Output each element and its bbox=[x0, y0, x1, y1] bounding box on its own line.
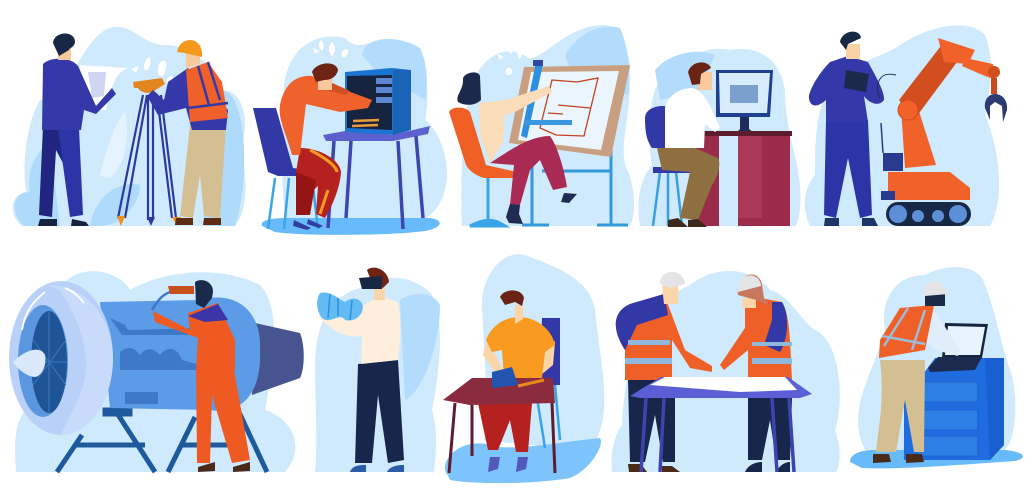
woman bbox=[457, 72, 577, 224]
background blob bbox=[461, 25, 634, 226]
floor bbox=[445, 438, 601, 483]
tripod bbox=[117, 95, 181, 226]
nozzle bbox=[252, 323, 304, 395]
man bbox=[873, 281, 960, 463]
panel: surveyors bbox=[13, 27, 245, 226]
cabinet bbox=[904, 358, 1004, 460]
background blob bbox=[612, 271, 840, 472]
floor bbox=[850, 450, 1023, 468]
white sprig bbox=[131, 57, 173, 84]
background blob bbox=[638, 49, 800, 226]
panel: computer repair bbox=[253, 37, 447, 235]
background blob bbox=[282, 37, 447, 226]
panel: soldering table bbox=[443, 254, 604, 483]
computer tower bbox=[345, 68, 411, 135]
white sprig bbox=[497, 42, 522, 75]
chair bbox=[645, 106, 700, 226]
drafting board bbox=[509, 60, 630, 157]
floor bbox=[262, 218, 440, 235]
drafting stand bbox=[522, 150, 628, 225]
background blob bbox=[805, 25, 999, 226]
robot arm bbox=[877, 38, 1007, 226]
white sprig bbox=[313, 40, 348, 57]
leaf bbox=[400, 294, 440, 400]
nacelle and fan bbox=[9, 281, 113, 435]
leaf bbox=[655, 52, 715, 100]
desk bbox=[696, 131, 792, 226]
chair bbox=[498, 318, 560, 448]
chair bbox=[253, 108, 320, 229]
background blob bbox=[482, 254, 604, 450]
table bbox=[443, 367, 555, 473]
man bbox=[616, 272, 712, 472]
background blob bbox=[858, 267, 1015, 450]
man bbox=[280, 63, 372, 230]
panel: laptop on cabinet bbox=[850, 267, 1023, 468]
surveyor bbox=[147, 40, 228, 225]
laptop bbox=[928, 323, 988, 372]
hologram engine bbox=[317, 292, 363, 320]
table bbox=[630, 377, 812, 472]
panel: VR bbox=[315, 268, 440, 472]
blueprint paper bbox=[80, 65, 128, 110]
panel: blueprint team bbox=[612, 271, 840, 472]
engine body bbox=[100, 292, 260, 411]
background blob bbox=[15, 271, 295, 472]
panel: robot arm bbox=[805, 25, 1007, 226]
leaves bbox=[15, 90, 244, 226]
leaf bbox=[362, 39, 427, 100]
table bbox=[323, 126, 430, 229]
man bbox=[809, 32, 884, 226]
background blob bbox=[315, 278, 440, 472]
panel: jet engine bbox=[9, 271, 304, 472]
stand bbox=[57, 410, 267, 472]
survey instrument bbox=[133, 78, 165, 93]
man bbox=[478, 290, 555, 472]
chair bbox=[449, 108, 517, 226]
man bbox=[657, 62, 720, 227]
panel: drafting bbox=[449, 25, 634, 226]
man with blueprint bbox=[38, 33, 128, 226]
background blob bbox=[13, 27, 245, 226]
panel: computer desk bbox=[638, 49, 800, 227]
mechanic bbox=[153, 280, 250, 472]
leaves bbox=[565, 27, 629, 95]
man bbox=[318, 268, 404, 472]
monitor bbox=[716, 70, 773, 132]
woman bbox=[720, 275, 792, 472]
pale leaf bbox=[100, 110, 127, 178]
